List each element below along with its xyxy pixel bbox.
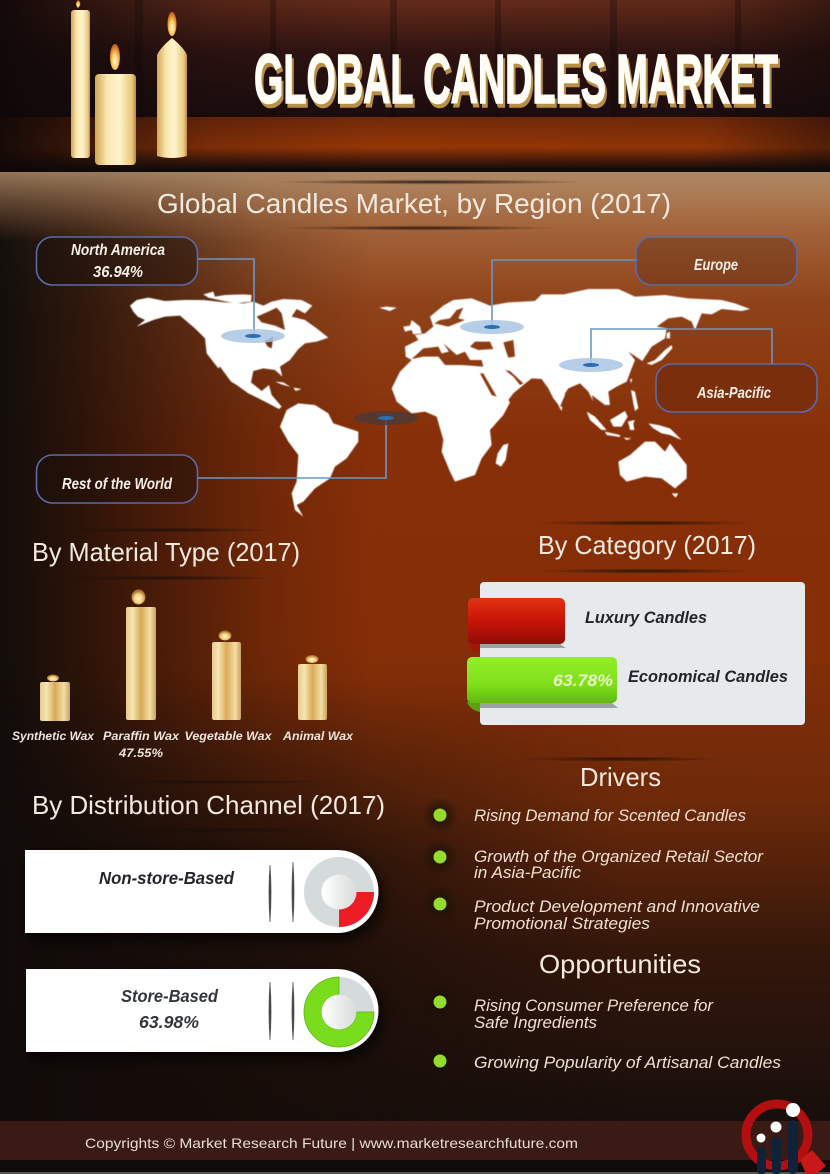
heading: material type: By Material Type (2017) bbox=[32, 537, 300, 567]
candle: Paraffin Wax: Paraffin Wax bbox=[103, 731, 180, 743]
driver: organized retail bbox=[422, 839, 764, 882]
callout: Europe bbox=[460, 237, 797, 334]
opportunity: artisanal candles: Growing Popularity of Artisanal Candles bbox=[474, 1053, 782, 1072]
footer text: Copyrights © Market Research Future | www.marketresearchfuture.com bbox=[85, 1135, 578, 1151]
heading: distribution channel: By Distribution Channel (2017) bbox=[32, 790, 385, 820]
callout: Europe: Europe bbox=[694, 257, 738, 274]
candle: Paraffin Wax: 47.55% bbox=[118, 748, 163, 760]
opportunity: artisanal candles bbox=[422, 1043, 782, 1079]
callout: North America bbox=[36, 237, 285, 343]
heading: material type bbox=[32, 528, 300, 580]
heading: drivers: Drivers bbox=[580, 762, 661, 792]
candle: Synthetic Wax: Synthetic Wax bbox=[12, 731, 95, 743]
panel: Non-store-Based bbox=[25, 850, 378, 933]
callout: Asia-Pacific: Asia-Pacific bbox=[696, 385, 771, 402]
candle: Paraffin Wax bbox=[103, 590, 180, 760]
callout: Asia-Pacific bbox=[559, 329, 817, 412]
logo bbox=[746, 1103, 826, 1174]
donut chart: Store-Based bbox=[304, 977, 374, 1047]
callout: Rest of the World: Rest of the World bbox=[62, 476, 173, 493]
heading: opportunities: Opportunities bbox=[539, 949, 701, 979]
map: Asia and Oceania bbox=[555, 289, 750, 498]
opportunity: safe ingredients bbox=[422, 984, 714, 1032]
heading: drivers bbox=[520, 756, 720, 792]
ribbon: Economical Candles: Economical Candles bbox=[628, 668, 788, 686]
driver: organized retail: in Asia-Pacific bbox=[474, 863, 581, 882]
candle: Synthetic Wax bbox=[12, 674, 95, 743]
panel: Store-Based bbox=[26, 969, 378, 1052]
opportunity: safe ingredients: Safe Ingredients bbox=[474, 1013, 597, 1032]
map: Americas bbox=[130, 292, 358, 517]
heading: category bbox=[535, 520, 756, 574]
world map bbox=[130, 289, 750, 517]
footer band bbox=[0, 1121, 830, 1174]
driver: scented candles bbox=[422, 797, 746, 833]
driver: product development: Promotional Strategies bbox=[474, 914, 651, 933]
ribbon: Luxury Candles: Luxury Candles bbox=[585, 609, 707, 627]
ribbon: Economical Candles: 63.78% bbox=[553, 671, 613, 690]
candle: Vegetable Wax: Vegetable Wax bbox=[184, 731, 272, 743]
heading: distribution channel bbox=[32, 780, 385, 832]
donut chart: Non-store-Based bbox=[304, 857, 374, 927]
map: Europe and Africa bbox=[379, 294, 565, 482]
heading: category: By Category (2017) bbox=[538, 530, 756, 560]
panel: Non-store-Based: Non-store-Based bbox=[99, 868, 234, 888]
candle: Vegetable Wax bbox=[184, 630, 272, 743]
ribbon: Luxury Candles bbox=[468, 598, 707, 652]
callout: North America: North America bbox=[71, 242, 165, 259]
panel: category bbox=[467, 582, 805, 725]
driver: product development: Product Development and Innovative bbox=[474, 897, 760, 916]
callout: North America: 36.94% bbox=[93, 264, 143, 281]
candle: Animal Wax bbox=[282, 655, 354, 743]
opportunity: safe ingredients: Rising Consumer Preference for bbox=[474, 996, 714, 1015]
driver: product development bbox=[422, 886, 760, 933]
ribbon: Economical Candles bbox=[467, 657, 788, 712]
heading: region: Global Candles Market, by Region (2017) bbox=[157, 188, 671, 219]
panel: Store-Based: Store-Based bbox=[121, 986, 218, 1006]
callout: Rest of the World bbox=[36, 411, 418, 503]
heading: region bbox=[157, 180, 671, 230]
candles illustration bbox=[71, 0, 187, 165]
header banner bbox=[0, 0, 830, 172]
candle: Animal Wax: Animal Wax bbox=[282, 731, 354, 743]
driver: scented candles: Rising Demand for Scented Candles bbox=[474, 806, 746, 825]
driver: organized retail: Growth of the Organized Retail Sector bbox=[474, 847, 764, 866]
bar chart: material type candles bbox=[12, 590, 354, 760]
panel: Store-Based: 63.98% bbox=[139, 1012, 199, 1032]
